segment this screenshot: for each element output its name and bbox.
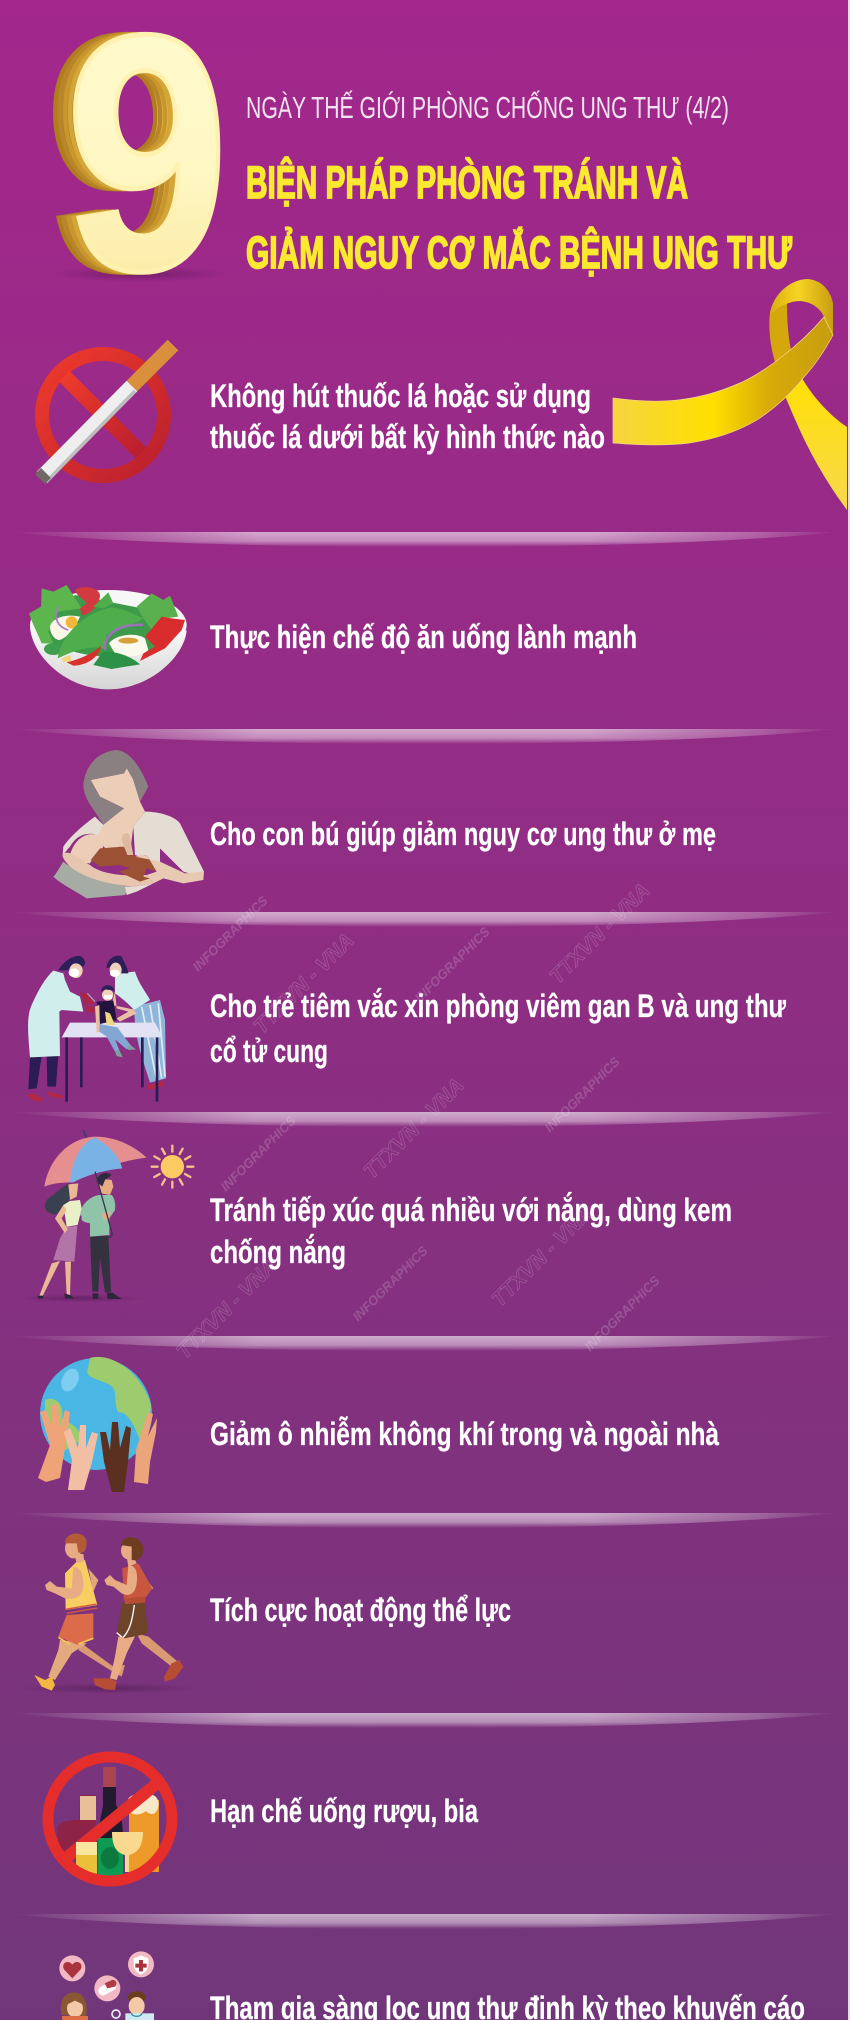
item 7: physical activity <box>18 1534 511 1694</box>
watermarks: TTXVN - VNA <box>172 1254 282 1364</box>
icon: no smoking <box>40 345 173 482</box>
watermarks <box>172 879 663 1364</box>
item 5: sun protection <box>18 1130 732 1302</box>
text: item 7: Tích cực hoạt động thể lực <box>210 1592 511 1628</box>
text: item 8: Hạn chế uống rượu, bia <box>210 1793 478 1829</box>
watermarks: INFOGRAPHICS <box>412 924 493 1005</box>
text: item 1: thuốc lá dưới bất kỳ hình thức nào <box>210 419 605 455</box>
watermarks: TTXVN - VNA <box>359 1074 469 1184</box>
watermarks: TTXVN - VNA <box>249 929 359 1039</box>
icon: breastfeeding mother <box>53 750 204 898</box>
icon: couple under umbrella and sun <box>18 1130 193 1302</box>
text: item 1 <box>210 378 605 455</box>
text: item 5 <box>210 1192 732 1270</box>
item 1: no smoking <box>40 345 605 482</box>
watermarks: INFOGRAPHICS <box>218 1113 299 1194</box>
watermarks: INFOGRAPHICS <box>190 893 271 974</box>
item 3: breastfeeding <box>53 750 716 898</box>
text: item 5: chống nắng <box>210 1234 346 1270</box>
item 9: screening <box>59 1951 805 2020</box>
icon: salad bowl <box>29 585 187 689</box>
text: item 2: Thực hiện chế độ ăn uống lành mạnh <box>210 619 637 655</box>
text: item 1: Không hút thuốc lá hoặc sử dụng <box>210 378 591 414</box>
icon: globe held by hands <box>38 1357 157 1492</box>
icon: doctor and mother vaccinating child <box>27 956 166 1102</box>
item 6: air pollution <box>38 1357 719 1492</box>
item 8: limit alcohol <box>48 1757 478 1881</box>
text: item 4 <box>210 988 787 1069</box>
watermarks: INFOGRAPHICS <box>542 1054 623 1135</box>
watermarks: INFOGRAPHICS <box>582 1273 663 1354</box>
item 4: vaccination <box>27 956 787 1102</box>
title <box>246 157 792 278</box>
watermarks: TTXVN - VNA <box>545 879 655 989</box>
icon: no alcohol <box>48 1757 172 1881</box>
icon: yellow awareness ribbon <box>613 279 847 510</box>
icon: cancer screening <box>59 1951 154 2020</box>
watermarks: INFOGRAPHICS <box>350 1243 431 1324</box>
item 2: healthy diet <box>29 585 637 689</box>
watermarks: TTXVN - VNA <box>487 1202 597 1312</box>
text: item 4: cổ tử cung <box>210 1033 328 1069</box>
icon: two runners <box>18 1534 198 1694</box>
